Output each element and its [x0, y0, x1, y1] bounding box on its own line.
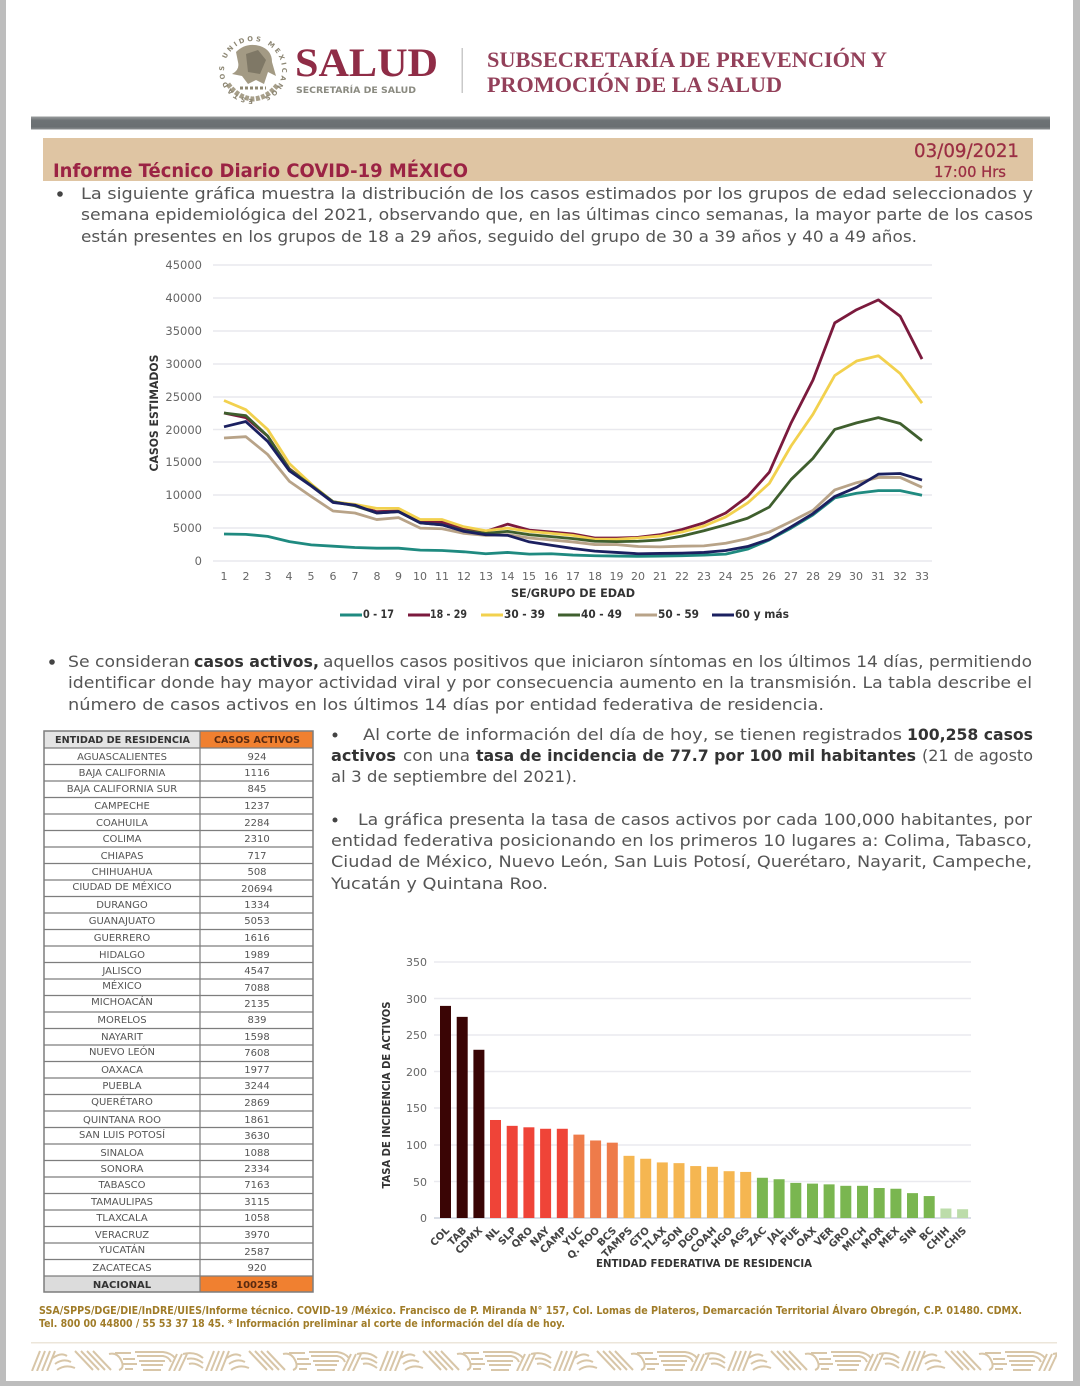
state labels: BCS	[596, 1225, 619, 1249]
state names: CHIAPAS	[101, 851, 143, 862]
intro paragraph	[57, 184, 1033, 246]
active case values: 5053	[244, 916, 270, 927]
icon: national seal: ESTADOS UNIDOS MEXICANOS	[219, 36, 288, 104]
x axis labels: 17	[566, 570, 580, 583]
footer note	[39, 1304, 1022, 1330]
x axis labels: 4	[286, 570, 292, 583]
state names: ZACATECAS	[92, 1263, 152, 1274]
active case values: 1088	[244, 1148, 270, 1159]
active case values: 2869	[244, 1098, 270, 1109]
x axis labels: 2	[242, 570, 250, 583]
legend: 0 - 17	[363, 607, 394, 621]
state labels: GRO	[827, 1225, 852, 1250]
intro paragraph: La siguiente gráfica muestra la distribución de los casos estimados por los grupos de edad seleccionados y	[81, 184, 1033, 203]
active case values: 1989	[244, 950, 270, 961]
x axis title: SE/GRUPO DE EDAD	[511, 586, 635, 600]
national total row: NACIONAL	[93, 1280, 152, 1291]
x axis labels: 28	[806, 570, 820, 583]
state labels: QRO	[510, 1225, 535, 1251]
x axis labels: 32	[893, 570, 907, 583]
title band	[43, 138, 1033, 182]
y axis labels: 45000	[165, 258, 202, 272]
state names: CHIHUAHUA	[92, 867, 153, 878]
state labels: AGS	[728, 1225, 752, 1249]
active case values: 2284	[244, 818, 270, 829]
national total row: 100258	[236, 1280, 278, 1291]
state names: HIDALGO	[99, 950, 145, 961]
y axis labels: 30000	[165, 357, 202, 371]
state labels: GTO	[628, 1225, 652, 1250]
state names: OAXACA	[101, 1065, 143, 1076]
state names: CAMPECHE	[94, 801, 150, 812]
x axis labels: 15	[522, 570, 536, 583]
active case values: 20694	[241, 884, 273, 895]
state names: NUEVO LEÓN	[89, 1045, 155, 1058]
state labels: ZAC	[746, 1225, 769, 1249]
x axis labels: 23	[697, 570, 711, 583]
y axis title: TASA DE INCIDENCIA DE ACTIVOS	[381, 1002, 393, 1188]
active case values: 1334	[244, 900, 270, 911]
state labels: MICH	[841, 1225, 869, 1254]
x axis labels: 18	[588, 570, 602, 583]
state labels: YUC	[561, 1225, 585, 1250]
y axis labels: 300	[406, 993, 427, 1006]
footer note: Tel. 800 00 44800 / 55 53 37 18 45. * Información preliminar al corte de información del día de hoy.	[39, 1318, 565, 1330]
state labels: OAX	[795, 1225, 819, 1250]
x axis labels: 19	[610, 570, 624, 583]
paragraph: casos activos totals: 100,258 casos	[907, 725, 1033, 744]
header logo	[219, 36, 887, 104]
active case values: 7088	[244, 983, 270, 994]
state names: SINALOA	[100, 1148, 144, 1159]
line chart: casos estimados	[147, 258, 932, 621]
active case values: 3244	[244, 1081, 270, 1092]
state labels: SIN	[898, 1225, 919, 1247]
legend: 60 y más	[735, 607, 789, 621]
casos activos paragraph: aquellos casos positivos que iniciaron síntomas en los últimos 14 días, permitiendo	[323, 652, 1032, 671]
casos activos paragraph	[49, 652, 1032, 714]
state names: QUINTANA ROO	[83, 1115, 161, 1126]
decorative footer band	[31, 1350, 1057, 1371]
active case values: 1861	[244, 1115, 270, 1126]
state labels: CDMX	[454, 1225, 485, 1257]
active case values: 1598	[244, 1032, 270, 1043]
intro paragraph: están presentes en los grupos de 18 a 29 años, seguido del grupo de 30 a 39 años y 40 a 49 años.	[81, 227, 917, 246]
active case values: 717	[247, 851, 267, 862]
grey divider bar	[31, 116, 1050, 130]
x axis labels: 16	[544, 570, 558, 583]
state labels: Q. ROO	[566, 1225, 602, 1262]
subsecretaría title	[487, 46, 887, 97]
x axis labels: 20	[631, 570, 645, 583]
state labels: COAH	[689, 1225, 719, 1256]
table header: ENTIDAD DE RESIDENCIA	[55, 735, 190, 746]
state names: SAN LUIS POTOSÍ	[79, 1128, 165, 1141]
state labels: SLP	[497, 1225, 519, 1248]
x axis labels: 29	[828, 570, 842, 583]
active case values: 3630	[244, 1131, 270, 1142]
x axis labels: 12	[457, 570, 471, 583]
state labels: PUE	[779, 1225, 802, 1249]
y axis labels: 35000	[165, 324, 202, 338]
state labels: SON	[660, 1225, 685, 1250]
active case values: 1977	[244, 1065, 270, 1076]
y axis labels: 25000	[165, 390, 202, 404]
state names: SONORA	[101, 1164, 144, 1175]
state names: MORELOS	[97, 1015, 147, 1026]
active case values: 2334	[244, 1164, 270, 1175]
state names: COLIMA	[103, 834, 142, 845]
x axis labels: 7	[352, 570, 358, 583]
national total row	[44, 1276, 313, 1292]
state labels: NAY	[528, 1225, 553, 1249]
paragraph: top 10 states: entidad federativa posicionando en los primeros 10 lugares a: Colima, Tabasco,	[331, 831, 1032, 850]
state names: TABASCO	[97, 1180, 146, 1191]
bar chart: tasa de incidencia	[381, 956, 971, 1270]
x axis labels: 8	[374, 570, 380, 583]
active case values: 7608	[244, 1048, 270, 1059]
state labels: TLAX	[641, 1225, 669, 1253]
x axis labels: 10	[413, 570, 427, 583]
x axis labels: 1	[220, 570, 228, 583]
x axis labels: 24	[718, 570, 732, 583]
active case values: 2135	[244, 999, 270, 1010]
active case values: 3970	[244, 1230, 270, 1241]
x axis title: ENTIDAD FEDERATIVA DE RESIDENCIA	[596, 1258, 813, 1270]
y axis labels: 10000	[165, 488, 202, 502]
bars	[440, 1006, 968, 1218]
subsecretaría title: PROMOCIÓN DE LA SALUD	[487, 71, 782, 97]
state names: VERACRUZ	[95, 1230, 149, 1241]
paragraph: casos activos totals: (21 de agosto	[922, 746, 1033, 765]
x axis labels: 30	[849, 570, 863, 583]
legend: 30 - 39	[504, 607, 545, 621]
paragraph: casos activos totals: al 3 de septiembre del 2021).	[331, 767, 577, 786]
active case values: 924	[247, 752, 267, 763]
y axis labels	[406, 956, 427, 1225]
x axis labels: 3	[264, 570, 272, 583]
casos activos paragraph: casos activos,	[194, 652, 319, 671]
y axis labels: 15000	[165, 455, 202, 469]
casos activos paragraph: Se consideran	[68, 652, 190, 671]
state names: NAYARIT	[101, 1032, 144, 1043]
intro paragraph: semana epidemiológica del 2021, observando que, en las últimas cinco semanas, la mayor parte de los casos	[81, 205, 1033, 224]
x axis labels: 25	[740, 570, 754, 583]
secretaría label: SECRETARÍA DE SALUD	[296, 84, 416, 96]
state names: CIUDAD DE MÉXICO	[72, 880, 172, 893]
state names: JALISCO	[101, 966, 142, 977]
state labels: CHIS	[943, 1225, 969, 1252]
y axis labels: 5000	[173, 521, 202, 535]
casos activos paragraph: identificar donde hay mayor actividad viral y por consecuencia aumento en la transmisión. La tabla describe el	[68, 673, 1032, 692]
x axis labels: 13	[479, 570, 493, 583]
state names: MICHOACÁN	[91, 995, 153, 1008]
state names: TLAXCALA	[95, 1213, 148, 1224]
y axis labels: 0	[195, 554, 202, 568]
legend: 40 - 49	[581, 607, 622, 621]
state labels: BC	[918, 1225, 936, 1244]
state labels: COL	[429, 1225, 453, 1249]
paragraph: casos activos totals: activos	[331, 746, 396, 765]
paragraph: top 10 states	[330, 810, 1032, 893]
state names: PUEBLA	[102, 1081, 142, 1092]
state labels: CAMP	[538, 1225, 569, 1256]
table header	[44, 731, 313, 748]
state names: GUERRERO	[94, 933, 150, 944]
state labels: TAMPS	[600, 1225, 635, 1260]
state names: YUCATÁN	[98, 1243, 145, 1256]
active case values: 920	[247, 1263, 267, 1274]
y axis labels: 350	[406, 956, 427, 969]
y axis labels: 50	[413, 1176, 427, 1189]
legend: 50 - 59	[658, 607, 699, 621]
active case values: 7163	[244, 1180, 270, 1191]
table header: CASOS ACTIVOS	[214, 735, 300, 746]
subsecretaría title: SUBSECRETARÍA DE PREVENCIÓN Y	[487, 46, 887, 72]
y axis labels: 150	[406, 1102, 427, 1115]
active case values: 3115	[244, 1197, 270, 1208]
x axis labels: 22	[675, 570, 689, 583]
x axis labels: 14	[500, 570, 514, 583]
legend: 18 - 29	[430, 607, 467, 621]
x axis labels: 33	[915, 570, 929, 583]
state labels: JAL	[765, 1225, 787, 1246]
state names: DURANGO	[96, 900, 148, 911]
paragraph: casos activos totals: con una	[403, 746, 470, 765]
state labels: VER	[813, 1225, 836, 1249]
casos activos paragraph: número de casos activos en los últimos 14 días por entidad federativa de residencia.	[68, 695, 824, 714]
time: 17:00 Hrs	[934, 163, 1006, 181]
state labels: DGO	[677, 1225, 702, 1251]
data series	[224, 300, 922, 556]
state labels: MEX	[877, 1225, 902, 1250]
state names	[67, 752, 177, 1274]
paragraph: top 10 states: Yucatán y Quintana Roo.	[330, 874, 548, 893]
state names: COAHUILA	[96, 818, 148, 829]
active case values: 2587	[244, 1247, 270, 1258]
active case values: 1116	[244, 768, 270, 779]
paragraph: top 10 states: La gráfica presenta la tasa de casos activos por cada 100,000 habitantes, por	[358, 810, 1032, 829]
table: casos activos por entidad	[44, 731, 313, 1292]
state labels: NL	[484, 1225, 503, 1244]
active case values: 1616	[244, 933, 270, 944]
date: 03/09/2021	[914, 140, 1019, 162]
SALUD wordmark: SALUD	[295, 40, 438, 85]
y axis labels: 100	[406, 1139, 427, 1152]
state names: BAJA CALIFORNIA	[79, 768, 165, 779]
state labels: HGO	[710, 1225, 735, 1251]
x axis labels: 31	[871, 570, 885, 583]
active case values: 2310	[244, 834, 270, 845]
x axis labels: 26	[762, 570, 776, 583]
title: Informe Técnico Diario COVID-19 MÉXICO	[53, 159, 468, 182]
paragraph: casos activos totals: tasa de incidencia de 77.7 por 100 mil habitantes	[476, 746, 916, 765]
active case values: 1237	[244, 801, 270, 812]
paragraph: top 10 states: Ciudad de México, Nuevo León, San Luis Potosí, Querétaro, Nayarit, Campeche,	[331, 852, 1032, 871]
state names: GUANAJUATO	[89, 916, 155, 927]
x axis labels: 5	[308, 570, 314, 583]
x axis labels: 11	[435, 570, 449, 583]
x axis labels: 21	[653, 570, 667, 583]
y axis labels: 250	[406, 1029, 427, 1042]
y axis title: CASOS ESTIMADOS	[147, 354, 161, 472]
active case values: 4547	[244, 966, 270, 977]
y axis labels: 20000	[165, 423, 202, 437]
x axis labels: 6	[330, 570, 336, 583]
state names: AGUASCALIENTES	[77, 752, 167, 763]
state labels	[429, 1225, 969, 1262]
active case values: 1058	[244, 1213, 270, 1224]
active case values: 845	[247, 784, 267, 795]
active case values: 508	[247, 867, 267, 878]
x axis labels: 9	[395, 570, 402, 583]
y axis labels: 0	[420, 1212, 427, 1225]
state names: MÉXICO	[102, 979, 142, 992]
y axis labels: 200	[406, 1066, 427, 1079]
state labels: MOR	[860, 1225, 886, 1252]
active case values	[241, 752, 273, 1274]
state labels: CHIH	[925, 1225, 952, 1253]
paragraph: casos activos totals	[331, 725, 1033, 786]
state names: TAMAULIPAS	[90, 1197, 153, 1208]
x axis labels: 27	[784, 570, 798, 583]
active case values: 839	[247, 1015, 267, 1026]
state names: QUERÉTARO	[91, 1095, 153, 1108]
y axis labels	[165, 258, 202, 568]
paragraph: casos activos totals: Al corte de información del día de hoy, se tienen registrados	[363, 725, 902, 744]
state names: BAJA CALIFORNIA SUR	[67, 784, 177, 795]
x axis labels	[220, 570, 929, 583]
y axis labels: 40000	[165, 291, 202, 305]
legend	[340, 607, 789, 621]
state labels: TAB	[446, 1225, 469, 1248]
